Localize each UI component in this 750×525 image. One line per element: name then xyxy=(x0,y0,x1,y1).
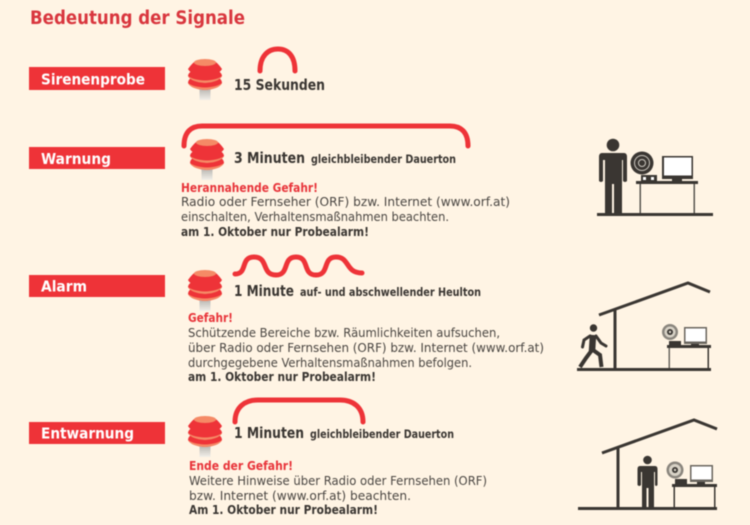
text block: Alarm instructions: Gefahr! xyxy=(188,310,233,325)
text block: Warnung instructions: einschalten, Verhaltensmaßnahmen beachten. xyxy=(181,209,449,224)
signal arc: 1 minute tone xyxy=(235,400,363,422)
icon: siren xyxy=(188,59,222,100)
duration text xyxy=(234,149,456,167)
icon: siren xyxy=(190,139,224,180)
panel: Warnung xyxy=(29,126,713,239)
title: Bedeutung der Signale xyxy=(30,8,245,29)
duration text: 1 Minute xyxy=(234,282,294,300)
text block: Alarm instructions xyxy=(188,310,544,384)
signal wave: rising and falling tone xyxy=(235,257,362,275)
icon: siren xyxy=(188,270,222,311)
label: Sirenenprobe xyxy=(29,67,165,90)
text block: Entwarnung instructions: Am 1. Oktober nur Probealarm! xyxy=(189,502,378,517)
text block: Warnung instructions xyxy=(181,180,510,239)
label: Warnung: Warnung xyxy=(41,150,111,168)
text block: Entwarnung instructions: Weitere Hinweise über Radio oder Fernsehen (ORF) xyxy=(189,473,487,488)
duration text: gleichbleibender Dauerton xyxy=(311,152,456,166)
label: Alarm xyxy=(29,275,165,297)
duration text: 15 Sekunden xyxy=(234,76,325,94)
signal arc: short tone xyxy=(260,49,295,71)
duration text xyxy=(234,282,481,300)
text block: Warnung instructions: Herannahende Gefahr! xyxy=(181,180,318,195)
icon: person with radio and TV at desk xyxy=(597,139,713,216)
icon: person inside house with radio and TV xyxy=(578,420,717,510)
text block: Entwarnung instructions: bzw. Internet (www.orf.at) beachten. xyxy=(189,488,411,503)
duration text: gleichbleibender Dauerton xyxy=(310,427,454,441)
duration text: auf- und abschwellender Heulton xyxy=(300,285,481,299)
signal arc: 3 minute tone xyxy=(184,126,468,146)
text block: Warnung instructions: Radio oder Fernseher (ORF) bzw. Internet (www.orf.at) xyxy=(181,194,510,209)
duration text: 1 Minuten xyxy=(234,424,304,442)
duration text: 3 Minuten xyxy=(234,149,305,167)
text block: Entwarnung instructions xyxy=(189,458,487,517)
panel: Entwarnung xyxy=(29,400,717,517)
label: Sirenenprobe: Sirenenprobe xyxy=(41,70,145,88)
text block: Alarm instructions: am 1. Oktober nur Probealarm! xyxy=(188,369,376,384)
label: Entwarnung: Entwarnung xyxy=(41,424,134,442)
icon: siren xyxy=(188,416,222,457)
text block: Alarm instructions: durchgegebene Verhaltensmaßnahmen befolgen. xyxy=(188,355,472,370)
text block: Alarm instructions: über Radio oder Fernsehen (ORF) bzw. Internet (www.orf.at) xyxy=(188,340,544,355)
text block: Warnung instructions: am 1. Oktober nur Probealarm! xyxy=(181,224,369,239)
label: Warnung xyxy=(29,147,165,169)
text block: Entwarnung instructions: Ende der Gefahr! xyxy=(189,458,293,473)
label: Alarm: Alarm xyxy=(41,278,87,296)
duration text xyxy=(234,424,454,442)
text block: Alarm instructions: Schützende Bereiche bzw. Räumlichkeiten aufsuchen, xyxy=(188,325,500,340)
label: Entwarnung xyxy=(29,422,165,444)
panel: Sirenenprobe xyxy=(29,49,325,100)
panel: Alarm xyxy=(29,257,711,384)
icon: person walking into house with radio and TV xyxy=(577,283,711,371)
